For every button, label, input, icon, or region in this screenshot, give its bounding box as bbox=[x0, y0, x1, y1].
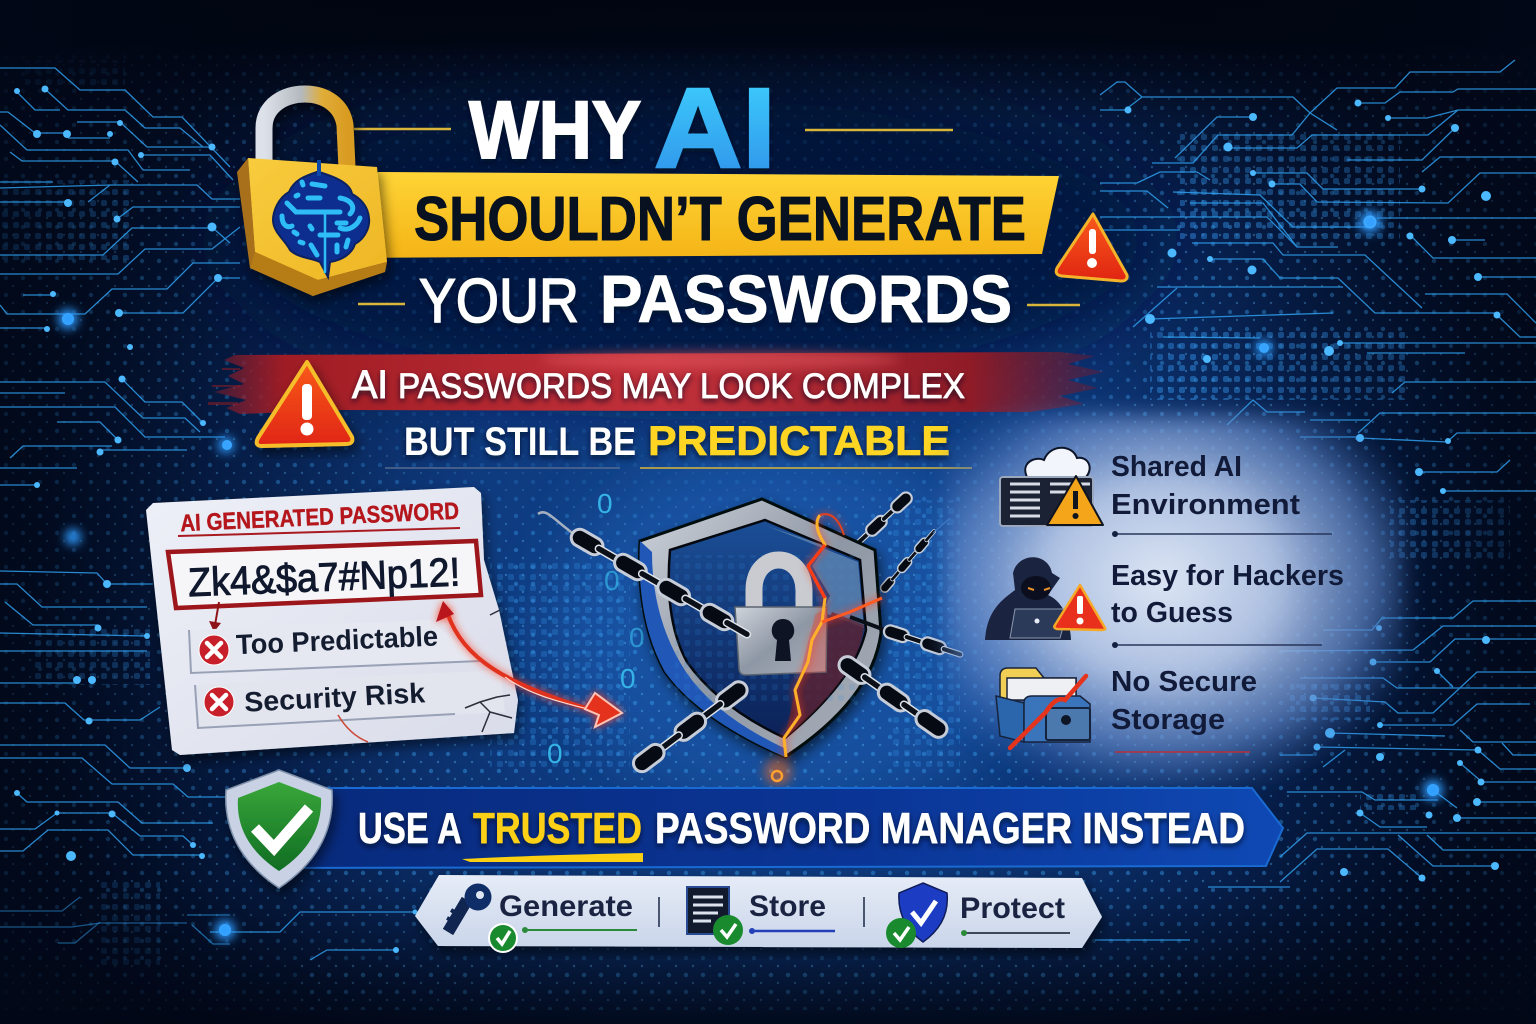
padlock with AI brain bbox=[237, 94, 387, 296]
red brush stripe bbox=[214, 351, 1104, 414]
row: security risk bbox=[195, 670, 505, 728]
warning text line 2 bbox=[404, 417, 950, 464]
binary digits: 0 bbox=[597, 488, 613, 519]
icon: cloud server warning bbox=[1000, 448, 1103, 526]
panel glow bbox=[945, 415, 1405, 790]
underline accents bbox=[385, 467, 972, 469]
banner text: SHOULDN’T GENERATE bbox=[414, 185, 1026, 254]
card heading: AI GENERATED PASSWORD bbox=[180, 498, 460, 537]
padlock body side bbox=[237, 158, 318, 296]
risk: no secure storage bbox=[996, 666, 1257, 752]
risk: easy for hackers to guess: to Guess bbox=[1111, 597, 1233, 629]
features strip bbox=[415, 875, 1102, 953]
feature: store bbox=[687, 887, 835, 945]
warning text line 2: BUT STILL BE bbox=[404, 420, 636, 464]
blue banner bbox=[240, 788, 1283, 868]
title line: your passwords: PASSWORDS bbox=[600, 262, 1012, 337]
banner text: USE A bbox=[358, 804, 462, 853]
check badge bbox=[488, 923, 518, 953]
chain: lower left bbox=[630, 678, 751, 775]
risk label: Easy for Hackers bbox=[1111, 560, 1344, 592]
risk: shared AI environment: Environment bbox=[1111, 489, 1300, 521]
shield inner field bbox=[669, 520, 866, 738]
warning text line 1: AI bbox=[352, 363, 388, 407]
crack in shield bbox=[784, 514, 882, 757]
padlock shackle bbox=[264, 94, 347, 168]
warning text line 2: PREDICTABLE bbox=[648, 417, 950, 464]
row: security risk: Security Risk bbox=[243, 677, 426, 718]
chains behind shield bbox=[851, 490, 950, 594]
feature: store: Store bbox=[749, 890, 826, 923]
icon: warning triangle left bbox=[257, 362, 352, 446]
binary digits: 0 bbox=[604, 565, 620, 596]
risk: easy for hackers to guess bbox=[985, 557, 1344, 648]
panel: risks list bbox=[945, 415, 1405, 790]
binary digits: 0 bbox=[629, 622, 645, 653]
row: too predictable: Too Predictable bbox=[235, 621, 439, 660]
feature: generate bbox=[447, 884, 637, 953]
icon: AI brain bbox=[273, 160, 369, 277]
icon: green check shield bbox=[226, 770, 332, 888]
icon: folder with broken lock bbox=[996, 668, 1090, 748]
icon: hacker with laptop bbox=[985, 557, 1105, 640]
title line: why AI: WHY bbox=[469, 85, 641, 176]
glowing ring under shield bbox=[764, 758, 792, 786]
check badge bbox=[713, 915, 743, 945]
feature: generate: Generate bbox=[499, 890, 633, 923]
chain: upper left bbox=[538, 512, 754, 643]
warning banner bbox=[214, 351, 1104, 468]
padlock body bbox=[248, 158, 387, 280]
title accent lines bbox=[354, 129, 1080, 305]
binary digits: 0 bbox=[620, 663, 636, 694]
warning text line 1: PASSWORDS MAY LOOK COMPLEX bbox=[398, 367, 965, 406]
arrow: card to shield bbox=[436, 601, 622, 727]
chain: lower right bbox=[836, 653, 950, 741]
row: too predictable bbox=[189, 620, 480, 673]
padlock centre bbox=[735, 560, 827, 675]
shield with broken padlock and chains bbox=[538, 490, 965, 786]
password box: Zk4&$a7#Np12! bbox=[187, 550, 461, 605]
feature: protect: Protect bbox=[960, 892, 1065, 925]
icon: warning triangle right of banner bbox=[1056, 214, 1127, 281]
title line: why AI: AI bbox=[654, 65, 776, 191]
binary digits: 0 bbox=[547, 738, 563, 769]
yellow underline bbox=[462, 853, 643, 862]
title line: why AI bbox=[469, 65, 776, 191]
check badge bbox=[886, 918, 916, 948]
shield outer rim bbox=[640, 499, 881, 757]
risk: shared AI environment bbox=[1000, 448, 1332, 537]
title bbox=[345, 65, 1080, 337]
title line: your passwords bbox=[419, 262, 1012, 337]
feature: protect bbox=[886, 883, 1070, 948]
card cracks bbox=[465, 610, 512, 732]
call to action banner bbox=[226, 770, 1283, 888]
card sheet bbox=[146, 487, 518, 755]
risk: no secure storage: Storage bbox=[1111, 704, 1225, 736]
title line: your passwords: YOUR bbox=[419, 267, 579, 336]
binary digits bbox=[547, 488, 645, 769]
risk label: No Secure bbox=[1111, 666, 1257, 698]
yellow banner bbox=[345, 172, 1059, 258]
risk label: Shared AI bbox=[1111, 451, 1242, 483]
banner text: PASSWORD MANAGER INSTEAD bbox=[655, 804, 1245, 853]
chain: right bbox=[850, 617, 965, 661]
strip background bbox=[415, 875, 1102, 948]
panel: AI generated password card bbox=[146, 487, 518, 755]
banner text: TRUSTED bbox=[473, 804, 642, 853]
banner text bbox=[358, 804, 1245, 853]
icon: key bbox=[447, 884, 492, 932]
icon: document bbox=[687, 887, 729, 934]
arrow: down to row bbox=[209, 602, 221, 632]
icon: blue shield bbox=[899, 883, 947, 942]
